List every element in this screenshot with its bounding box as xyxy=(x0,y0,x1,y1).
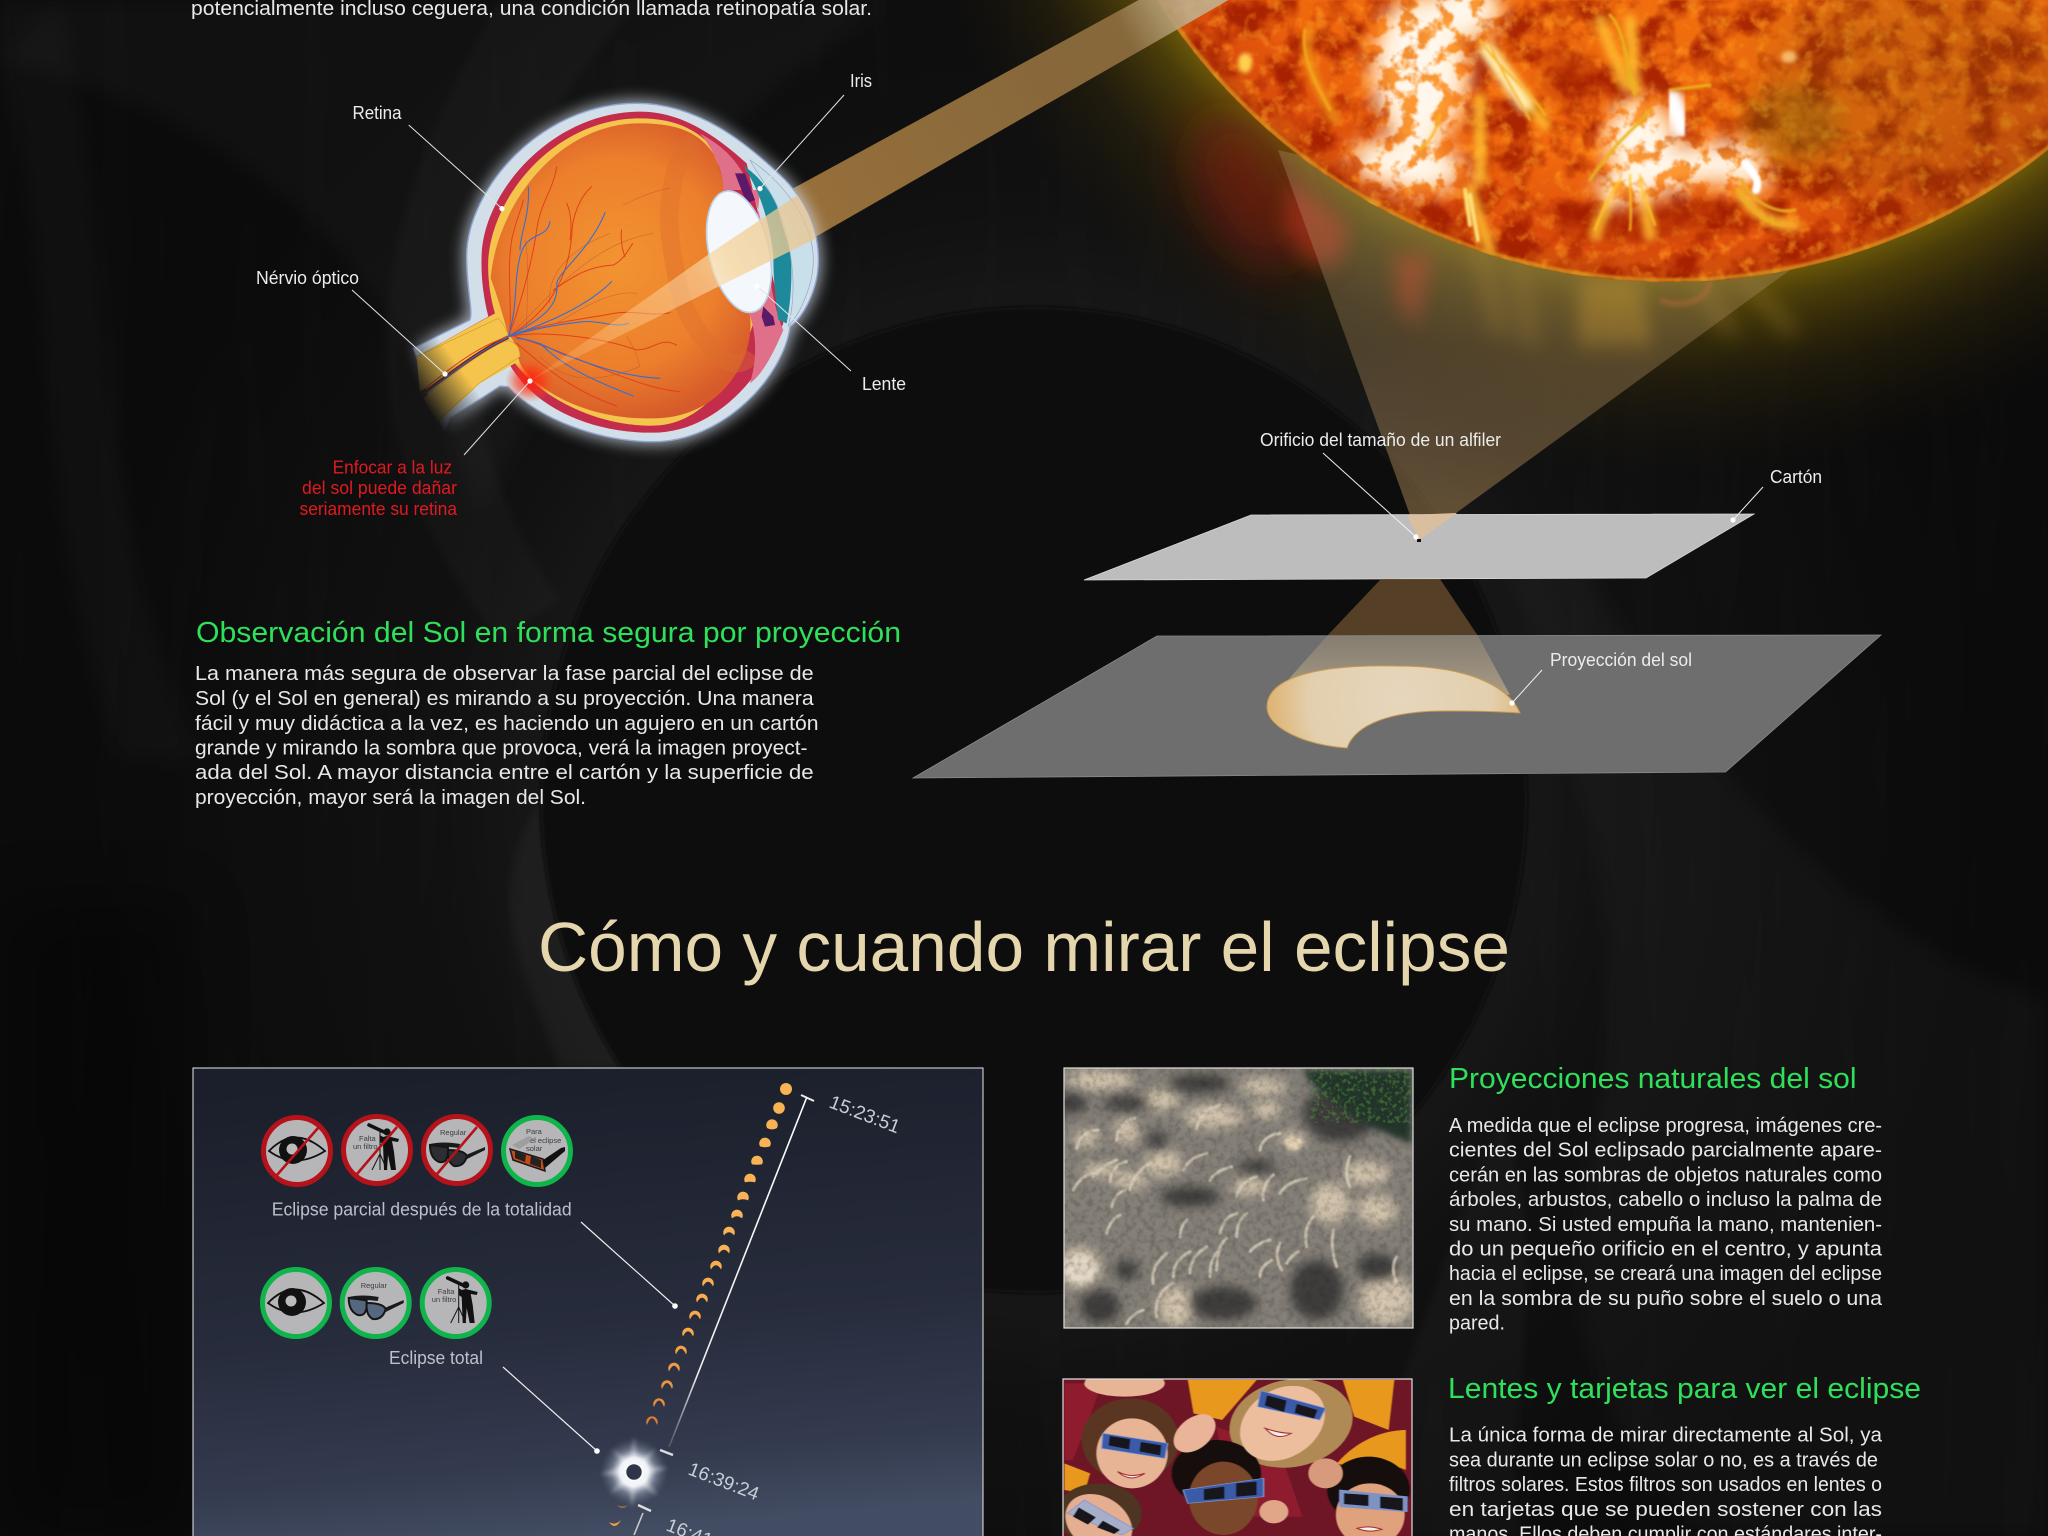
callout: retina damage warning: seriamente su retina xyxy=(300,499,458,519)
icons: partial eclipse safety xyxy=(264,1116,570,1184)
focused light beam xyxy=(532,195,816,380)
totality corona xyxy=(600,1436,668,1508)
label: partial eclipse: Eclipse parcial después de la totalidad xyxy=(272,1200,572,1220)
shadow areas xyxy=(1053,1074,1397,1323)
sunlit patches xyxy=(1060,1070,1413,1327)
text block: safe observation: ada del Sol. A mayor distancia entre el cartón y la superficie de xyxy=(195,762,814,784)
text block: safe observation: fácil y muy didáctica a la vez, es haciendo un agujero en un cartón xyxy=(195,713,818,735)
beam on cardboard xyxy=(1407,513,1457,540)
pinhole xyxy=(1417,539,1421,542)
posterior chamber xyxy=(735,173,775,327)
ciliary folds xyxy=(669,140,752,363)
eclipse glasses xyxy=(1067,1391,1407,1535)
icon: eclipse glasses allowed: el eclipse xyxy=(530,1136,561,1145)
icon: regular sunglasses allowed: Regular xyxy=(361,1281,387,1290)
projection surface xyxy=(913,635,1881,778)
icon: eye cross-section xyxy=(413,100,840,445)
icon: eclipse glasses allowed: Para xyxy=(526,1127,543,1136)
text block: safe observation: La manera más segura de observar la fase parcial del eclipse de xyxy=(195,663,814,685)
fan glow xyxy=(1307,20,1795,260)
ciliary tissue xyxy=(700,133,783,383)
leader line: partial eclipse xyxy=(581,1222,678,1309)
callout: pinhole xyxy=(1260,430,1501,540)
callout: retina damage warning: Enfocar a la luz xyxy=(333,457,452,477)
cardboard sheet xyxy=(1084,514,1754,580)
label: total eclipse: Eclipse total xyxy=(389,1348,483,1368)
light cone below cardboard xyxy=(1327,579,1478,636)
time bracket line xyxy=(634,1095,814,1535)
callout: retina: Retina xyxy=(352,103,402,123)
heading: natural projections: Proyecciones naturales del sol xyxy=(1449,1063,1856,1095)
icon: eclipse glasses allowed xyxy=(504,1118,570,1184)
icon: regular sunglasses forbidden xyxy=(424,1116,490,1184)
projected crescent sun xyxy=(1267,666,1520,748)
bright loops xyxy=(1304,15,1795,240)
text block: natural projections: cerán en las sombras de objetos naturales como xyxy=(1449,1164,1882,1186)
callout: retina damage warning xyxy=(300,378,533,519)
text block: natural projections: do un pequeño orificio en el centro, y apunta xyxy=(1449,1238,1883,1260)
photo: students with eclipse glasses xyxy=(1055,1370,1412,1536)
callout: retina xyxy=(352,103,505,211)
hands xyxy=(1166,1411,1224,1456)
icon: regular sunglasses forbidden: Regular xyxy=(440,1128,467,1137)
text block: natural projections: hacia el eclipse, se creará una imagen del eclipse xyxy=(1449,1263,1882,1285)
text block: glasses and cards: sea durante un eclipse solar o no, es a través de xyxy=(1449,1449,1878,1471)
callout: optic nerve xyxy=(256,268,448,377)
callout: lens xyxy=(754,283,906,394)
icon: regular sunglasses allowed xyxy=(342,1270,409,1336)
callout: sun projection xyxy=(1509,650,1692,706)
time labels: 15:23:51 xyxy=(826,1092,903,1138)
text block: natural projections xyxy=(1449,1115,1883,1335)
heading: safe observation: Observación del Sol en forma segura por proyección xyxy=(196,617,901,649)
icon: telescope without filter forbidden xyxy=(344,1116,410,1184)
faces xyxy=(1096,1418,1168,1488)
time labels: 16:39:24 xyxy=(685,1459,762,1505)
icon: telescope without filter forbidden: un filtro xyxy=(353,1142,378,1151)
solar disc xyxy=(1157,0,2048,282)
text block: natural projections: A medida que el eclipse progresa, imágenes cre- xyxy=(1449,1115,1882,1137)
heading: glasses and cards: Lentes y tarjetas para ver el eclipse xyxy=(1448,1373,1921,1405)
icon: naked eye forbidden xyxy=(264,1118,330,1184)
callout: cardboard: Cartón xyxy=(1770,467,1822,487)
eclipse sequence xyxy=(609,1083,792,1526)
active regions xyxy=(1350,0,1768,205)
callout: sun projection: Proyección del sol xyxy=(1550,650,1692,670)
icons: total eclipse safety xyxy=(262,1270,489,1336)
red prominence glow xyxy=(1164,91,1336,289)
icon: telescope without filter forbidden: Falta xyxy=(359,1134,377,1143)
cornea xyxy=(750,160,813,326)
icon: eclipse glasses allowed: solar xyxy=(526,1144,543,1153)
foliage corner xyxy=(1303,1070,1412,1143)
crescent projections xyxy=(1073,1105,1397,1323)
text block: glasses and cards: en tarjetas que se pueden sostener con las xyxy=(1449,1499,1882,1521)
retinal veins xyxy=(423,167,680,406)
sun ray to eye xyxy=(770,0,1246,263)
title: Cómo y cuando mirar el eclipse xyxy=(538,908,1510,986)
icon: telescope allowed xyxy=(422,1270,489,1336)
icon: telescope allowed: un filtro xyxy=(432,1295,456,1304)
choroid layer xyxy=(417,112,783,433)
iris xyxy=(743,166,791,323)
eye diagram xyxy=(256,71,906,519)
retina layer xyxy=(417,118,753,426)
text block: natural projections: pared. xyxy=(1449,1313,1505,1335)
sun glow xyxy=(870,0,2048,474)
text block: natural projections: cientes del Sol eclipsado parcialmente apare- xyxy=(1449,1140,1882,1162)
callout: cardboard xyxy=(1730,467,1822,523)
retinal burn spot xyxy=(505,359,555,402)
projection diagram xyxy=(913,430,1881,778)
text block: natural projections: en la sombra de su puño sobre el suelo o una xyxy=(1449,1288,1883,1310)
optic nerve xyxy=(417,318,520,422)
hair xyxy=(1082,1398,1179,1482)
callout: pinhole: Orificio del tamaño de un alfiler xyxy=(1260,430,1501,450)
text block: safe observation xyxy=(195,663,818,809)
text block: natural projections: árboles, arbustos, cabello o incluso la palma de xyxy=(1449,1189,1882,1211)
light cone on surface xyxy=(1288,636,1510,695)
callout: iris xyxy=(757,71,872,191)
smiles xyxy=(1118,1428,1382,1531)
text block: glasses and cards: filtros solares. Estos filtros son usados en lentes o xyxy=(1449,1474,1882,1496)
leader line: total eclipse xyxy=(503,1367,600,1454)
icon: naked eye allowed xyxy=(262,1270,330,1336)
text block: safe observation: grande y mirando la sombra que provoca, verá la imagen proyect- xyxy=(195,738,808,760)
text block: safe observation: Sol (y el Sol en general) es mirando a su proyección. Una manera xyxy=(195,688,815,710)
light cone leaving the sun xyxy=(1278,150,1790,540)
text block: glasses and cards xyxy=(1449,1425,1883,1536)
time labels xyxy=(663,1092,903,1536)
text block: glasses and cards: La única forma de mirar directamente al Sol, ya xyxy=(1449,1425,1883,1447)
text block: safe observation: proyección, mayor será la imagen del Sol. xyxy=(195,787,586,809)
photo: natural projections on the ground xyxy=(1053,1068,1413,1328)
lens xyxy=(706,190,772,314)
clothing xyxy=(1064,1380,1406,1493)
text block: natural projections: su mano. Si usted empuña la mano, mantenien- xyxy=(1449,1214,1882,1236)
sun xyxy=(1000,0,2048,514)
callout: retina damage warning: del sol puede dañar xyxy=(302,478,457,498)
plumes below the limb xyxy=(1480,250,1790,340)
panel: eclipse timeline chart xyxy=(193,1068,983,1536)
callout: iris: Iris xyxy=(850,71,872,91)
icon: telescope allowed: Falta xyxy=(438,1287,455,1296)
callout: optic nerve: Nérvio óptico xyxy=(256,268,359,288)
vitreous body xyxy=(491,123,751,418)
callout: lens: Lente xyxy=(862,374,906,394)
